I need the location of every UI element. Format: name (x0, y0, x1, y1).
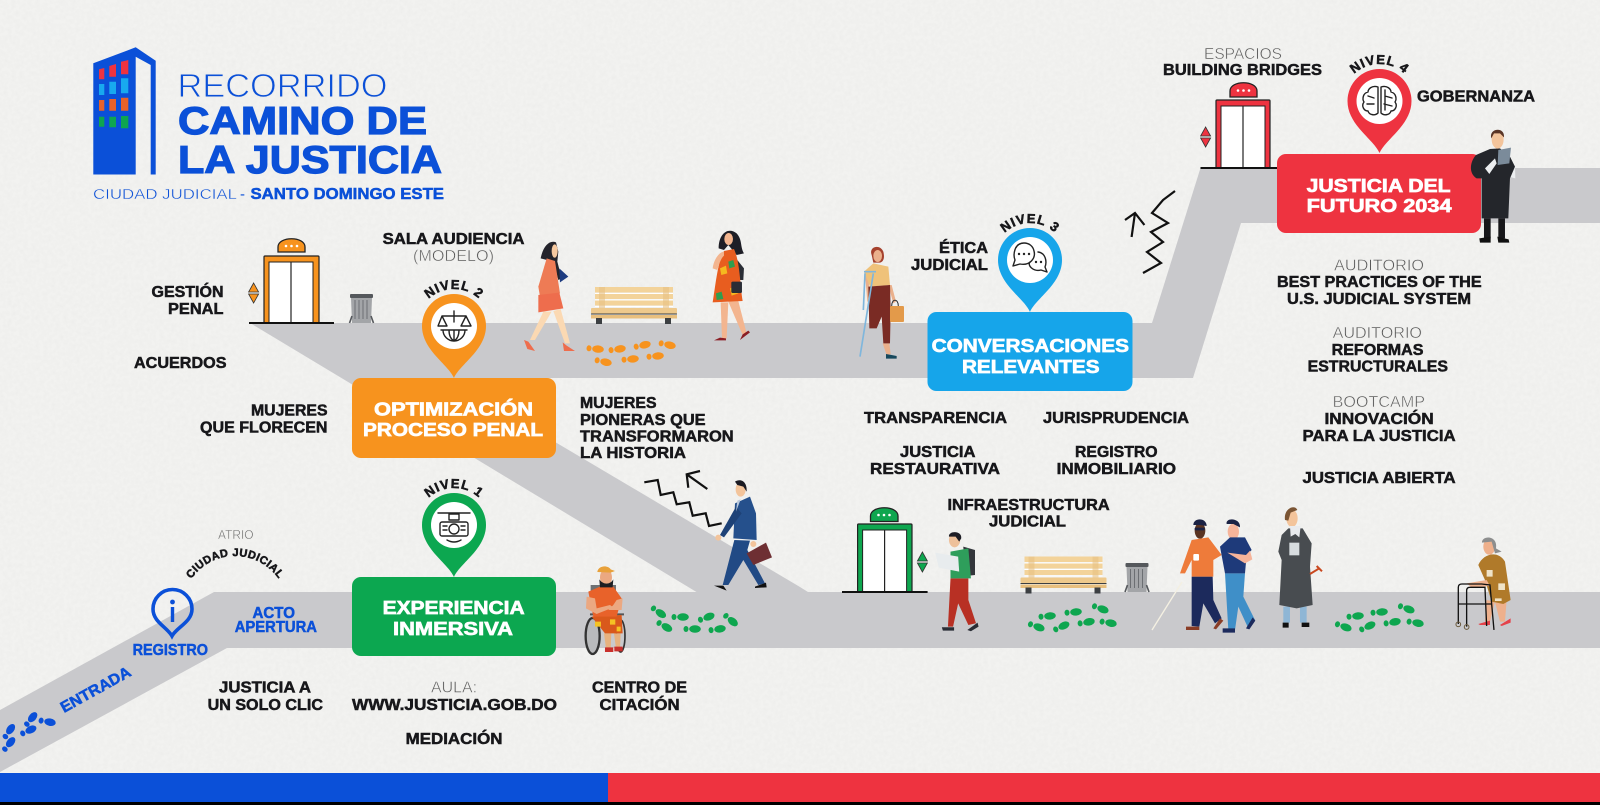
title: CIUDAD JUDICIAL (93, 186, 237, 203)
label: mujeres que florecen: QUE FLORECEN (200, 420, 328, 437)
label: registro inmobiliario: REGISTRO (1075, 444, 1158, 461)
label: espacios building bridges: BUILDING BRIDGES (1163, 62, 1322, 79)
panel: optimizacion proceso penal: PROCESO PENAL (363, 419, 543, 440)
pin: nivel 4: NIVEL 4 (1349, 54, 1409, 74)
stairs arrow up ramp 2 (1125, 191, 1175, 273)
label: bootcamp innovacion: PARA LA JUSTICIA (1302, 428, 1456, 445)
label: justicia restaurativa: RESTAURATIVA (870, 461, 1000, 478)
label: centro de citacion: CENTRO DE (592, 680, 687, 697)
label: aula web (352, 680, 557, 714)
label: auditorio reformas estructurales (1308, 325, 1448, 376)
label: mujeres pioneras: LA HISTORIA (580, 445, 686, 462)
label: bootcamp innovacion (1302, 394, 1456, 445)
bottom bar (0, 773, 1600, 805)
pin: nivel 1 (422, 478, 486, 577)
person: judge in black robe (1471, 130, 1515, 243)
footprints blue entrance (0, 710, 56, 753)
bench level 1 (1020, 556, 1106, 594)
label: espacios building bridges (1163, 46, 1322, 79)
label: registro: REGISTRO (133, 642, 208, 659)
label: infraestructura judicial: JUDICIAL (989, 514, 1066, 531)
panel: optimizacion proceso penal (352, 378, 556, 458)
footprints orange (586, 339, 676, 367)
label: auditorio reformas estructurales: ESTRUCTURALES (1308, 359, 1448, 376)
label: acto apertura: ACTO (252, 605, 295, 622)
label: sala audiencia: (MODELO) (413, 248, 494, 265)
person: man in wheelchair (586, 566, 625, 654)
title: SANTO DOMINGO ESTE (250, 186, 444, 203)
pin: nivel 1: NIVEL 1 (424, 478, 483, 498)
person: woman with crutches (860, 247, 904, 359)
panel: experiencia inmersiva: EXPERIENCIA (383, 597, 525, 618)
person: student with map (935, 532, 979, 631)
person: blind man with cane and friend (1152, 519, 1255, 633)
panel: optimizacion proceso penal: OPTIMIZACIÓN (374, 399, 533, 420)
pin: nivel 4 (1348, 54, 1412, 153)
label: acto apertura: APERTURA (235, 619, 317, 636)
label: acto apertura (235, 605, 317, 636)
person: woman in coral suit (524, 242, 575, 351)
pin: nivel 2 (422, 280, 486, 378)
panel: conversaciones relevantes (928, 312, 1132, 391)
label: infraestructura judicial: INFRAESTRUCTURA (948, 497, 1110, 514)
label: gestion penal: PENAL (168, 301, 224, 318)
panel: conversaciones relevantes: CONVERSACIONES (932, 335, 1129, 356)
label: etica judicial: ÉTICA (939, 240, 988, 257)
logo building (93, 47, 156, 174)
label: mujeres pioneras (580, 395, 734, 462)
label: etica judicial: JUDICIAL (911, 257, 988, 274)
label: centro de citacion: CITACIÓN (600, 696, 680, 714)
footprints green 2 (1027, 602, 1117, 634)
title (93, 67, 444, 203)
label: atrio ciudad judicial: CIUDAD JUDICIAL (186, 548, 282, 579)
label: mujeres que florecen: MUJERES (251, 403, 328, 420)
pin: nivel 3 (998, 214, 1062, 312)
label: gestion penal: GESTIÓN (152, 283, 224, 301)
label: auditorio reformas estructurales: REFORMAS (1332, 342, 1424, 359)
label: justicia a un solo clic: JUSTICIA A (219, 680, 311, 697)
label: mediacion: MEDIACIÓN (406, 730, 502, 748)
label: auditorio best practices: U.S. JUDICIAL SYSTEM (1287, 291, 1471, 308)
bench level 2 (591, 287, 677, 324)
label: aula web: AULA: (431, 680, 477, 697)
label: gestion penal (152, 283, 224, 318)
elevator: green level 1 (842, 508, 928, 592)
label: bootcamp innovacion: INNOVACIÓN (1324, 410, 1434, 428)
label: mujeres pioneras: PIONERAS QUE (580, 412, 706, 429)
pin: nivel 3: NIVEL 3 (1000, 214, 1059, 233)
title: - (240, 186, 245, 203)
label: auditorio best practices: AUDITORIO (1334, 258, 1424, 275)
label: auditorio best practices (1277, 258, 1482, 308)
label: espacios building bridges: ESPACIOS (1204, 46, 1282, 63)
label: auditorio reformas estructurales: AUDITORIO (1333, 325, 1422, 342)
road path (0, 168, 1600, 772)
label: entrada: ENTRADA (58, 664, 134, 716)
panel: justicia del futuro 2034 (1277, 154, 1481, 233)
label: registro inmobiliario (1057, 444, 1176, 478)
pin: registro (153, 590, 192, 636)
label: justicia abierta: JUSTICIA ABIERTA (1302, 470, 1456, 487)
label: atrio ciudad judicial (186, 527, 282, 579)
label: aula web: WWW.JUSTICIA.GOB.DO (352, 697, 557, 714)
stairs arrow down ramp 1 (644, 471, 722, 526)
label: justicia restaurativa: JUSTICIA (900, 444, 976, 461)
label: justicia a un solo clic: UN SOLO CLIC (208, 697, 323, 714)
person: businessman with briefcase (714, 480, 772, 591)
label: mujeres pioneras: TRANSFORMARON (580, 429, 734, 446)
panel: experiencia inmersiva: INMERSIVA (393, 618, 513, 639)
label: mujeres que florecen (200, 403, 328, 437)
trash can level 2 (350, 294, 374, 323)
label: jurisprudencia: JURISPRUDENCIA (1043, 410, 1189, 427)
label: sala audiencia (383, 231, 524, 265)
person: woman in floral dress (713, 231, 750, 340)
person: elderly woman with walker (1456, 537, 1511, 630)
label: centro de citacion (592, 680, 687, 714)
label: bootcamp innovacion: BOOTCAMP (1333, 394, 1425, 411)
label: auditorio best practices: BEST PRACTICES OF THE (1277, 274, 1482, 291)
label: justicia a un solo clic (208, 680, 323, 714)
panel: justicia del futuro 2034: FUTURO 2034 (1307, 195, 1452, 216)
label: sala audiencia: SALA AUDIENCIA (383, 231, 524, 248)
label: atrio ciudad judicial: ATRIO (218, 527, 254, 542)
title: CAMINO DE (178, 100, 427, 143)
label: mujeres pioneras: MUJERES (580, 395, 656, 412)
label: transparencia: TRANSPARENCIA (864, 410, 1007, 427)
title: RECORRIDO (178, 67, 388, 104)
label: etica judicial (911, 240, 988, 274)
footprints green 3 (1334, 602, 1424, 634)
label: justicia restaurativa (870, 444, 1000, 478)
footprints green 1 (649, 604, 740, 634)
elevator: orange level 2 (249, 239, 334, 323)
panel: experiencia inmersiva (352, 577, 556, 656)
person: judge with gavel (1278, 507, 1322, 628)
elevator: red level 4 (1200, 83, 1278, 168)
panel: justicia del futuro 2034: JUSTICIA DEL (1307, 175, 1451, 196)
label: acuerdos: ACUERDOS (134, 355, 226, 372)
trash can level 1 (1125, 563, 1149, 592)
title: LA JUSTICIA (178, 139, 442, 182)
pin: nivel 2: NIVEL 2 (424, 280, 483, 299)
label: infraestructura judicial (948, 497, 1110, 531)
label: gobernanza: GOBERNANZA (1417, 89, 1535, 106)
label: registro inmobiliario: INMOBILIARIO (1057, 461, 1176, 478)
panel: conversaciones relevantes: RELEVANTES (962, 356, 1100, 377)
